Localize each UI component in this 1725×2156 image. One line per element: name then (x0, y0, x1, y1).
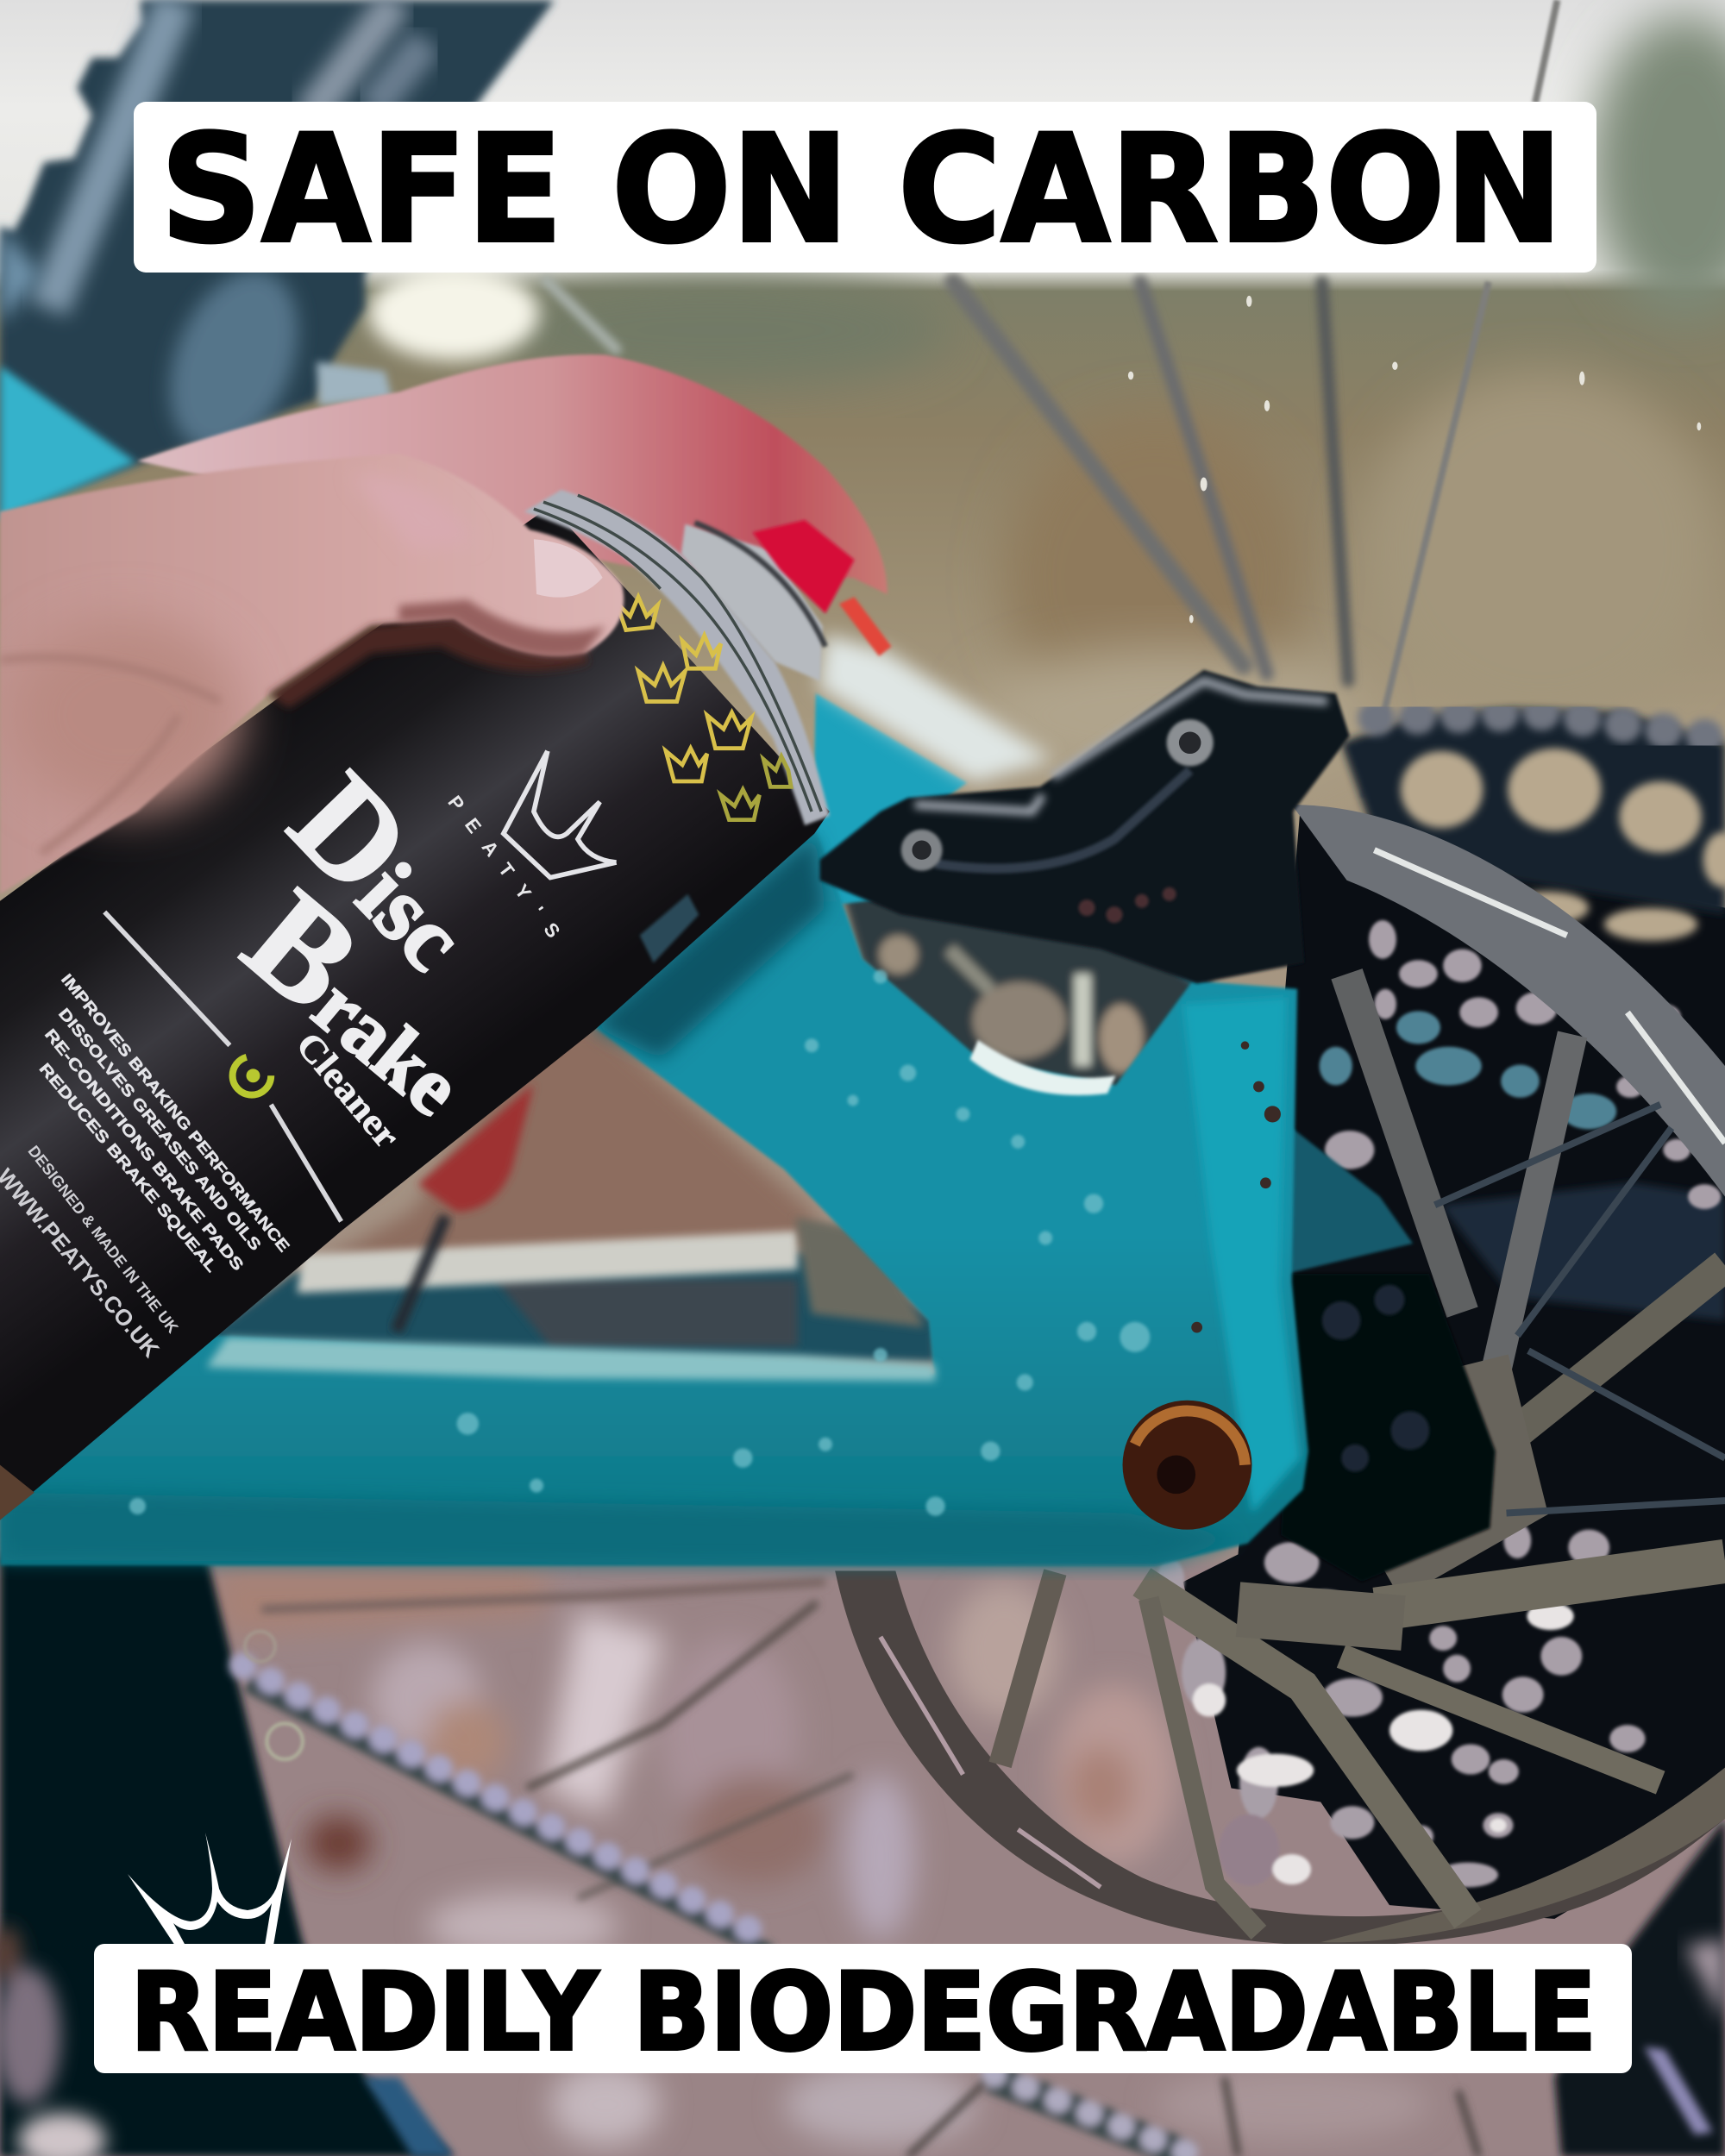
collar grooves (534, 495, 821, 812)
teal bike frame (0, 825, 1308, 1565)
dark blue cluster (1440, 1183, 1725, 1320)
background spokes (546, 280, 1348, 681)
dark hub (1281, 1274, 1496, 1582)
fingers behind can (138, 354, 888, 594)
product benefits: RE-CONDITIONS BRAKE PADS (41, 1025, 248, 1274)
heading: READILY BIODEGRADABLE (130, 1951, 1596, 2075)
mud on caliper (1078, 887, 1176, 923)
rotor spokes (1000, 974, 1725, 1933)
rotor slits (881, 1637, 1101, 1887)
heading: SAFE ON CARBON (160, 103, 1563, 276)
brake caliper (820, 670, 1350, 983)
can bottom rim (0, 1465, 34, 1520)
upper tube bright teal (812, 693, 967, 908)
product name (216, 744, 512, 1156)
palm crease (0, 657, 220, 853)
product name: Cleaner (288, 1025, 407, 1156)
bottom banner: readily biodegradable (94, 1944, 1632, 2075)
shade against the can (592, 834, 825, 1059)
thumb underside shadow (268, 619, 589, 708)
crown logo (504, 751, 617, 878)
thumb knuckle tint (351, 474, 474, 550)
bokeh highlights on cassette (1157, 920, 1721, 1887)
cassette windows (1401, 749, 1725, 941)
caliper highlights (915, 681, 1327, 812)
rear-ground and dark tyre (0, 1554, 1725, 2156)
sharp background spoke (1364, 0, 1558, 798)
frame bright panel (1183, 997, 1300, 1513)
frame lower shade (0, 1493, 1239, 1565)
palm and thumb (0, 454, 624, 894)
droplet rings (245, 1632, 303, 1759)
rotor bright slits (1374, 850, 1725, 1143)
product benefits: DISSOLVES GREASES AND OILS (55, 1005, 265, 1254)
spec icons (640, 894, 699, 962)
stem (396, 1216, 446, 1332)
label divider lines (104, 912, 342, 1221)
chainring teeth (1376, 712, 1725, 740)
thin wheel spokes (1435, 1105, 1725, 1513)
cassette chainring (1341, 708, 1725, 915)
brake rotor (835, 805, 1725, 1946)
mud specks (1191, 1041, 1281, 1333)
water droplets (129, 969, 1150, 1516)
rear frame gap with white reflection and dark tube (179, 1216, 936, 1362)
frame pivot bolt (1123, 1401, 1251, 1530)
highlight below caliper (969, 1040, 1116, 1095)
made in UK and website: DESIGNED & MADE IN THE UK (24, 1142, 183, 1337)
pattern of yellow crowns (617, 597, 791, 820)
can metal collar (524, 490, 830, 825)
rotor lower rim (835, 1570, 1725, 1946)
product benefits (36, 970, 293, 1275)
rotor upper rim (1292, 805, 1725, 1197)
frame tab behind rotor (1286, 1128, 1413, 1274)
dark wheel interior (1183, 812, 1725, 1919)
product name: Brake (216, 861, 511, 1143)
top banner: safe on carbon (134, 102, 1596, 276)
lower finger behind can (418, 1084, 534, 1212)
red nozzle (752, 520, 892, 656)
aerosol can (0, 490, 892, 1520)
green logo (233, 1056, 271, 1095)
top-left cassette, out of focus (0, 0, 555, 520)
bottom right dark wheel (1554, 1819, 1725, 2156)
chain out of focus (242, 1666, 1197, 2156)
hub knobs (1322, 1285, 1429, 1472)
thumb underside tint (399, 599, 605, 656)
background tan behind frame (303, 1018, 825, 1272)
thumbnail (534, 539, 603, 598)
product benefits: REDUCES BRAKE SQUEAL (36, 1059, 222, 1275)
caliper bolts (1167, 719, 1214, 766)
product name: Disc (261, 744, 512, 997)
crown icon (128, 1833, 292, 1946)
can neck dome (681, 524, 823, 681)
product benefits: IMPROVES BRAKING PERFORMANCE (58, 970, 293, 1255)
background thin spokes (261, 1582, 1479, 2156)
water spray specks (1128, 296, 1701, 624)
gears through the frame notch (839, 881, 1211, 1100)
spray jet (819, 634, 1052, 783)
Peaty's brand: PEATY'S (443, 792, 564, 942)
frame top highlight (206, 1337, 936, 1381)
palm tint (7, 619, 241, 812)
